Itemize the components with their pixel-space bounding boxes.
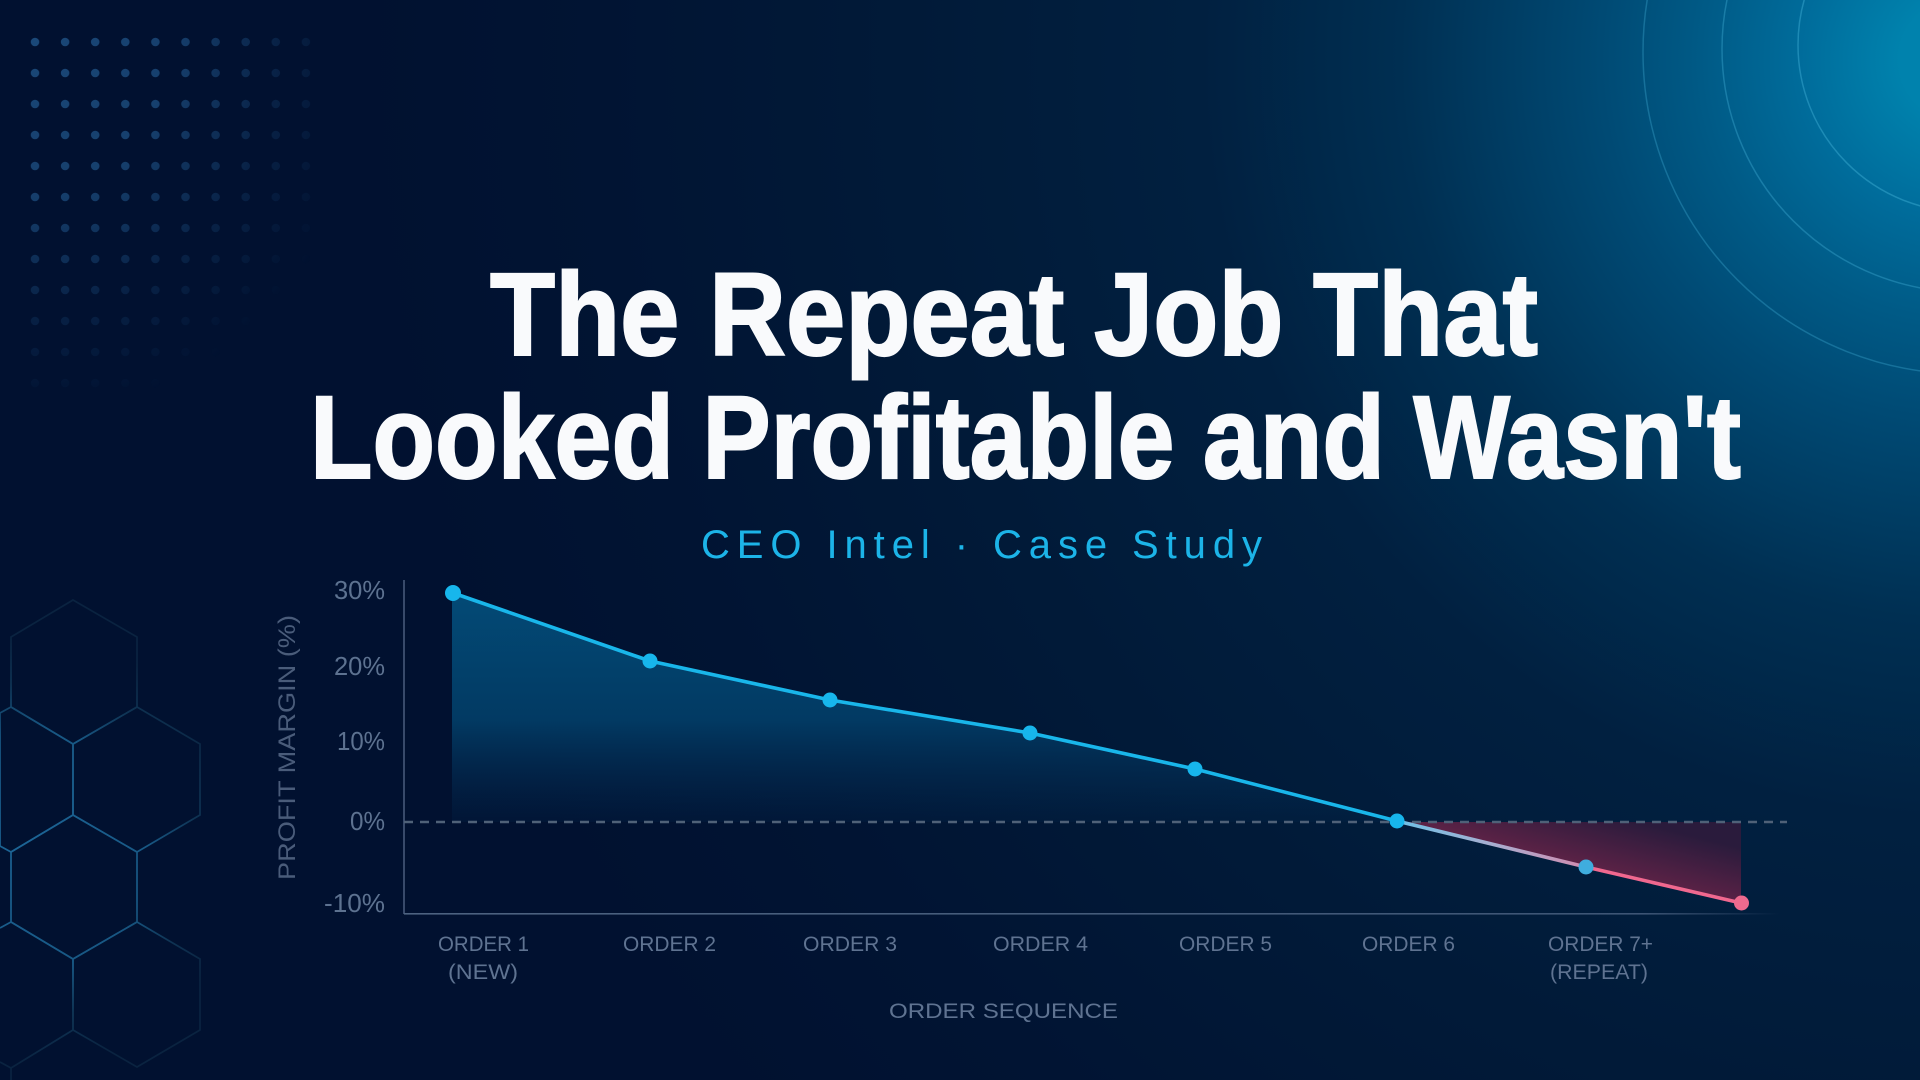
positive margin area	[452, 593, 1397, 822]
data points	[445, 585, 1749, 910]
title line 2: Looked Profitable and Wasn't	[310, 372, 1741, 504]
margin line: blue segment	[453, 593, 1397, 821]
margin line: transition segment	[1397, 821, 1586, 867]
decorative dot grid	[30, 38, 310, 356]
x axis order labels: ORDER 6	[1362, 932, 1455, 956]
y axis tick labels: 10%	[337, 726, 385, 756]
zero baseline	[404, 821, 1787, 823]
x axis order labels: ORDER 4	[993, 932, 1088, 956]
x axis order labels: ORDER 7+	[1548, 932, 1653, 956]
x axis order labels: ORDER 3	[803, 932, 897, 956]
hexagon network left	[0, 600, 200, 1080]
x axis order labels	[438, 932, 1653, 984]
y axis tick labels: -10%	[324, 888, 385, 918]
x axis order labels: ORDER 1	[438, 932, 529, 956]
y axis tick labels: 0%	[350, 806, 385, 836]
negative margin area	[1397, 822, 1741, 903]
x axis title: ORDER SEQUENCE	[889, 999, 1118, 1023]
x axis order labels: (NEW)	[448, 960, 518, 984]
y axis tick labels	[324, 575, 385, 918]
title	[310, 249, 1741, 504]
concentric circles top right	[1643, 0, 1920, 374]
x axis order labels: ORDER 5	[1179, 932, 1272, 956]
subtitle: CEO Intel · Case Study	[701, 523, 1262, 567]
y axis tick labels: 30%	[334, 575, 385, 605]
title line 1: The Repeat Job That	[490, 249, 1538, 381]
margin line: pink segment	[1586, 867, 1741, 903]
line chart: profit margin by order sequence	[274, 575, 1787, 1023]
x axis order labels: ORDER 2	[623, 932, 716, 956]
y axis title: PROFIT MARGIN (%)	[274, 615, 301, 880]
y axis tick labels: 20%	[334, 651, 385, 681]
x axis order labels: (REPEAT)	[1550, 960, 1648, 984]
axes	[404, 580, 1780, 915]
